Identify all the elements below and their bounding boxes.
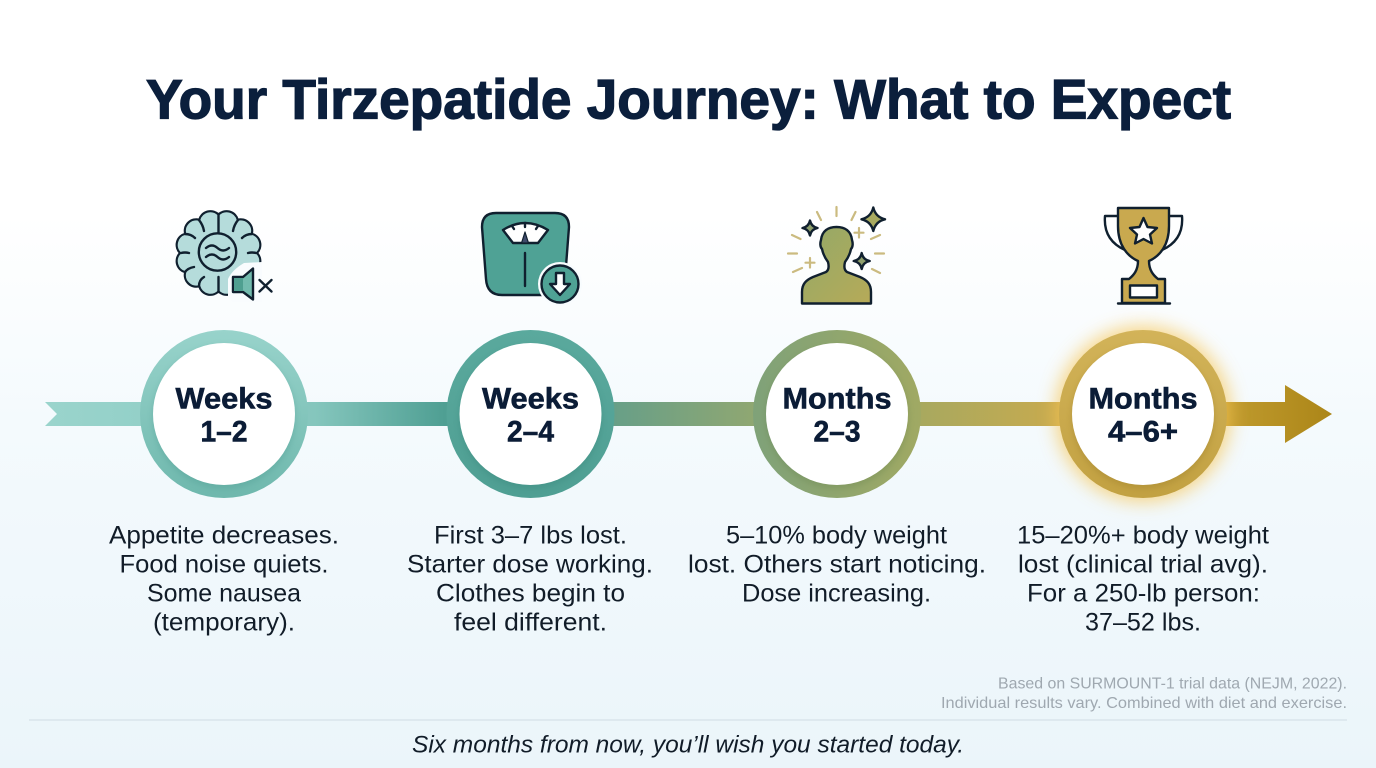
text: weeks 2-4 description: Clothes begin to	[436, 580, 625, 608]
text: months 2-3 description: lost. Others start noticing.	[688, 550, 986, 578]
text: months 2-3 description: 5–10% body weight	[726, 522, 947, 550]
text: months 4-6+ description: 37–52 lbs.	[1085, 608, 1201, 636]
text: months 4-6+ description: For a 250-lb person:	[1027, 580, 1260, 608]
footnote: Based on SURMOUNT-1 trial data (NEJM, 2022).	[998, 676, 1347, 692]
text: months 4-6+ description	[1017, 522, 1269, 636]
milestone: months 4-6+ highlighted: Months	[1088, 382, 1198, 416]
icon: person with sparkles	[788, 207, 885, 304]
milestone: months 4-6+ highlighted	[1055, 326, 1231, 502]
text: weeks 2-4 description: First 3–7 lbs lost.	[434, 522, 627, 550]
footnote: Individual results vary. Combined with diet and exercise.	[941, 695, 1347, 712]
text: weeks 2-4 description	[407, 522, 653, 636]
tagline: Six months from now, you’ll wish you started today.	[412, 732, 964, 758]
milestone: weeks 2-4	[446, 330, 614, 498]
text: weeks 1-2 description: Some nausea	[147, 580, 301, 608]
icon: trophy with star	[1105, 208, 1182, 304]
milestone: weeks 2-4: 2–4	[507, 416, 554, 448]
text: weeks 1-2 description	[109, 522, 339, 636]
icon: scale with down arrow	[482, 213, 582, 306]
text: weeks 1-2 description: (temporary).	[153, 608, 295, 636]
milestone: weeks 1-2: 1–2	[200, 416, 248, 448]
text: months 2-3 description: Dose increasing.	[742, 580, 931, 608]
text: weeks 1-2 description: Appetite decreases.	[109, 522, 339, 550]
title: Your Tirzepatide Journey: What to Expect	[146, 68, 1231, 130]
text: months 2-3 description	[688, 522, 986, 608]
milestone: months 2-3: 2–3	[814, 416, 860, 448]
milestone: months 2-3	[753, 330, 921, 498]
milestone: weeks 2-4: Weeks	[482, 382, 579, 416]
milestone: weeks 1-2	[140, 330, 308, 498]
milestone: weeks 1-2: Weeks	[176, 382, 272, 416]
milestone: months 2-3: Months	[782, 382, 892, 416]
text: weeks 2-4 description: Starter dose working.	[407, 550, 653, 578]
text: weeks 2-4 description: feel different.	[454, 608, 607, 636]
text: months 4-6+ description: 15–20%+ body weight	[1017, 522, 1269, 550]
text: months 4-6+ description: lost (clinical trial avg).	[1018, 550, 1268, 578]
timeline arrow	[45, 385, 1332, 443]
icon: quiet brain with muted speaker	[177, 211, 272, 302]
text: weeks 1-2 description: Food noise quiets.	[120, 550, 328, 578]
milestone: months 4-6+ highlighted: 4–6+	[1108, 416, 1178, 448]
footnote	[941, 676, 1347, 712]
